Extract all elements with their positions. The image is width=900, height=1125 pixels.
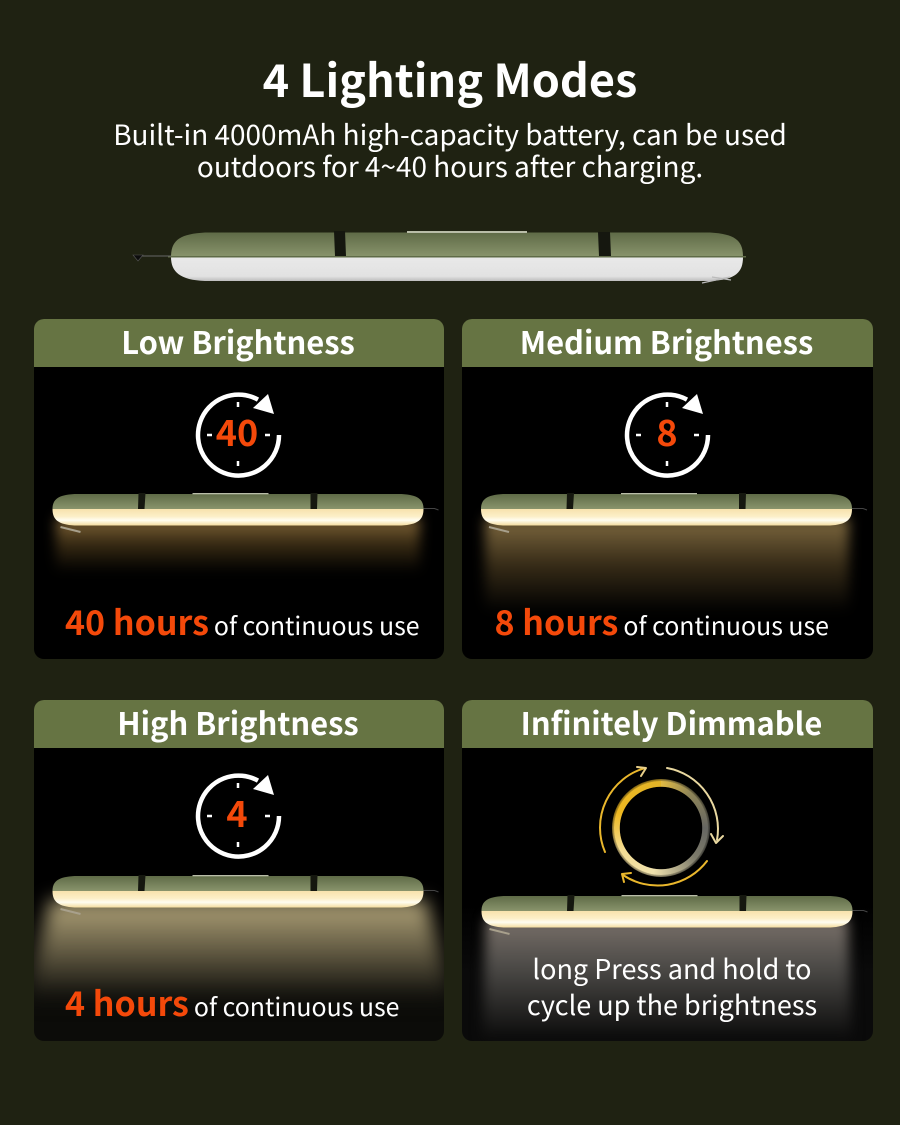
icon: 8 hour timer: 8 — [656, 405, 678, 457]
light glow — [56, 518, 420, 572]
subtitle: Built-in 4000mAh high-capacity battery, can be used — [113, 114, 787, 154]
illustration: timer and lit lamp — [48, 392, 439, 568]
product image: light bar — [132, 231, 746, 284]
illustration: timer and lit lamp — [476, 392, 868, 605]
heading: infinitely dimmable: Infinitely Dimmable — [521, 700, 822, 744]
heading: low brightness: Low Brightness — [121, 319, 355, 363]
light glow — [485, 518, 849, 612]
subtitle — [113, 114, 787, 186]
light glow — [482, 918, 852, 1040]
subtitle: outdoors for 4~40 hours after charging. — [197, 146, 703, 186]
lamp — [482, 895, 868, 934]
caption: long Press and hold to — [532, 948, 812, 987]
icon: 40 hour timer — [198, 394, 279, 476]
icon: 4 hour timer — [198, 775, 279, 857]
panel: infinitely dimmable — [462, 700, 873, 1041]
caption: 4 hoursof continuous use — [65, 977, 399, 1026]
illustration: dimming icon and lit lamp — [478, 766, 868, 1030]
icon: brightness ring — [612, 779, 710, 877]
lamp — [52, 493, 438, 532]
caption: 40 hoursof continuous use — [65, 596, 420, 645]
caption — [527, 948, 817, 1023]
light glow — [26, 900, 452, 1000]
illustration: timer and lit lamp — [34, 773, 444, 997]
panel: high brightness — [34, 700, 444, 1041]
lamp — [52, 875, 438, 914]
caption: cycle up the brightness — [527, 984, 817, 1023]
icon: cycle arrows — [600, 767, 723, 886]
heading: high brightness: High Brightness — [117, 700, 359, 744]
panel: medium brightness — [462, 319, 873, 659]
caption: 8 hoursof continuous use — [494, 596, 829, 645]
panel: low brightness — [34, 319, 444, 659]
icon: 4 hour timer: 4 — [226, 786, 248, 838]
icon: 8 hour timer — [627, 394, 708, 476]
heading: medium brightness: Medium Brightness — [520, 319, 813, 363]
lamp — [481, 493, 867, 532]
icon: 40 hour timer: 40 — [216, 405, 258, 457]
title: 4 Lighting Modes — [263, 45, 637, 110]
